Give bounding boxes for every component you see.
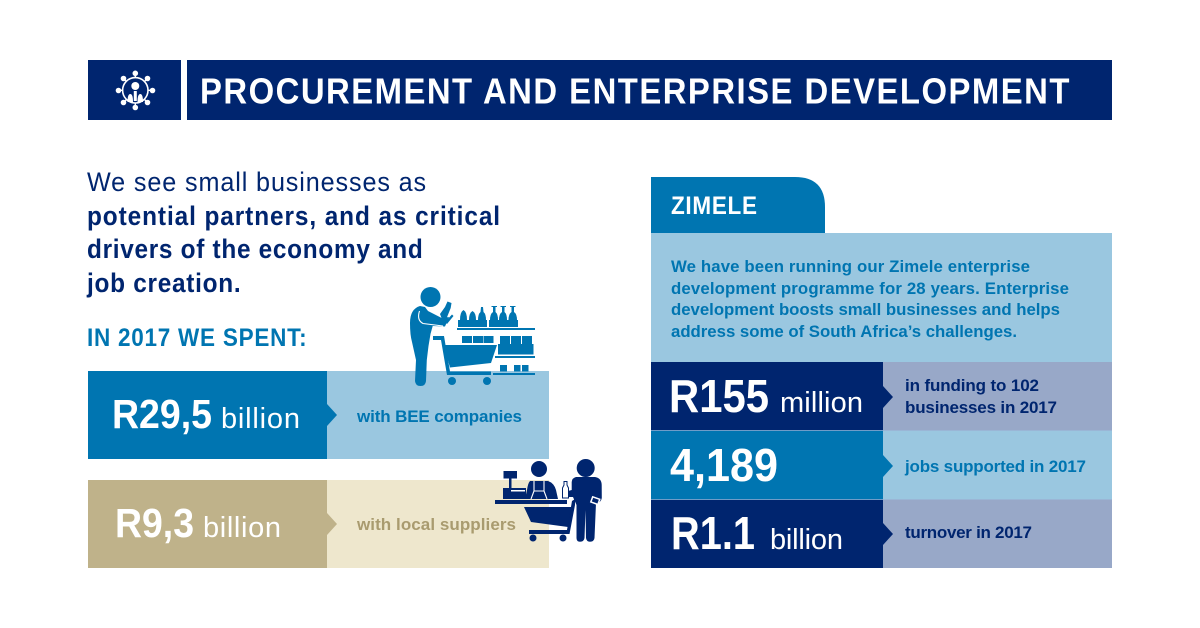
panel: Zimele: [651, 177, 1112, 568]
intro text block: We see small businesses as: [87, 168, 426, 197]
title: PROCUREMENT AND ENTERPRISE DEVELOPMENT: [200, 72, 1069, 112]
stat: funding: in funding to 102: [905, 376, 1039, 395]
description: We have been running our Zimele enterprise: [671, 257, 1030, 276]
intro text block: [86, 168, 500, 298]
intro text block: potential partners, and as critical: [87, 202, 500, 231]
tab heading: ZIMELE: [671, 192, 757, 220]
panel: BEE companies spend: R29,5: [112, 391, 212, 437]
stat: jobs: [651, 431, 1112, 499]
stat: funding: businesses in 2017: [905, 398, 1057, 417]
tab heading: [651, 177, 825, 233]
stat: funding: million: [780, 387, 863, 419]
header banner: [88, 60, 1112, 120]
description: development boosts small businesses and helps: [671, 300, 1060, 319]
stat: jobs: jobs supported in 2017: [904, 457, 1086, 476]
stat: funding: [651, 362, 1112, 430]
icon: network of people: [116, 70, 155, 110]
stat: turnover: R1.1: [671, 507, 755, 559]
panel: BEE companies spend: [88, 371, 549, 459]
stat: turnover: [651, 500, 1112, 568]
panel: BEE companies spend: with BEE companies: [356, 407, 522, 426]
stat: turnover: billion: [770, 524, 843, 556]
panel: BEE companies spend: billion: [221, 403, 300, 435]
subheading: IN 2017 WE SPENT:: [87, 324, 307, 352]
icon: shopper with trolley and shelves: [410, 287, 535, 386]
panel: local suppliers spend: R9,3: [115, 500, 194, 546]
intro text block: job creation.: [86, 269, 241, 298]
description: [671, 257, 1069, 341]
panel: local suppliers spend: billion: [203, 512, 281, 544]
icon: cashier and customer with trolley: [495, 459, 602, 542]
stat: turnover: turnover in 2017: [905, 523, 1032, 542]
stat: jobs: 4,189: [670, 439, 778, 491]
stat: funding: R155: [669, 370, 769, 422]
panel: local suppliers spend: [88, 480, 549, 568]
intro text block: drivers of the economy and: [87, 235, 423, 264]
description: address some of South Africa’s challenges.: [671, 322, 1017, 341]
description: development programme for 28 years. Enterprise: [671, 279, 1069, 298]
panel: local suppliers spend: with local suppliers: [356, 515, 516, 534]
